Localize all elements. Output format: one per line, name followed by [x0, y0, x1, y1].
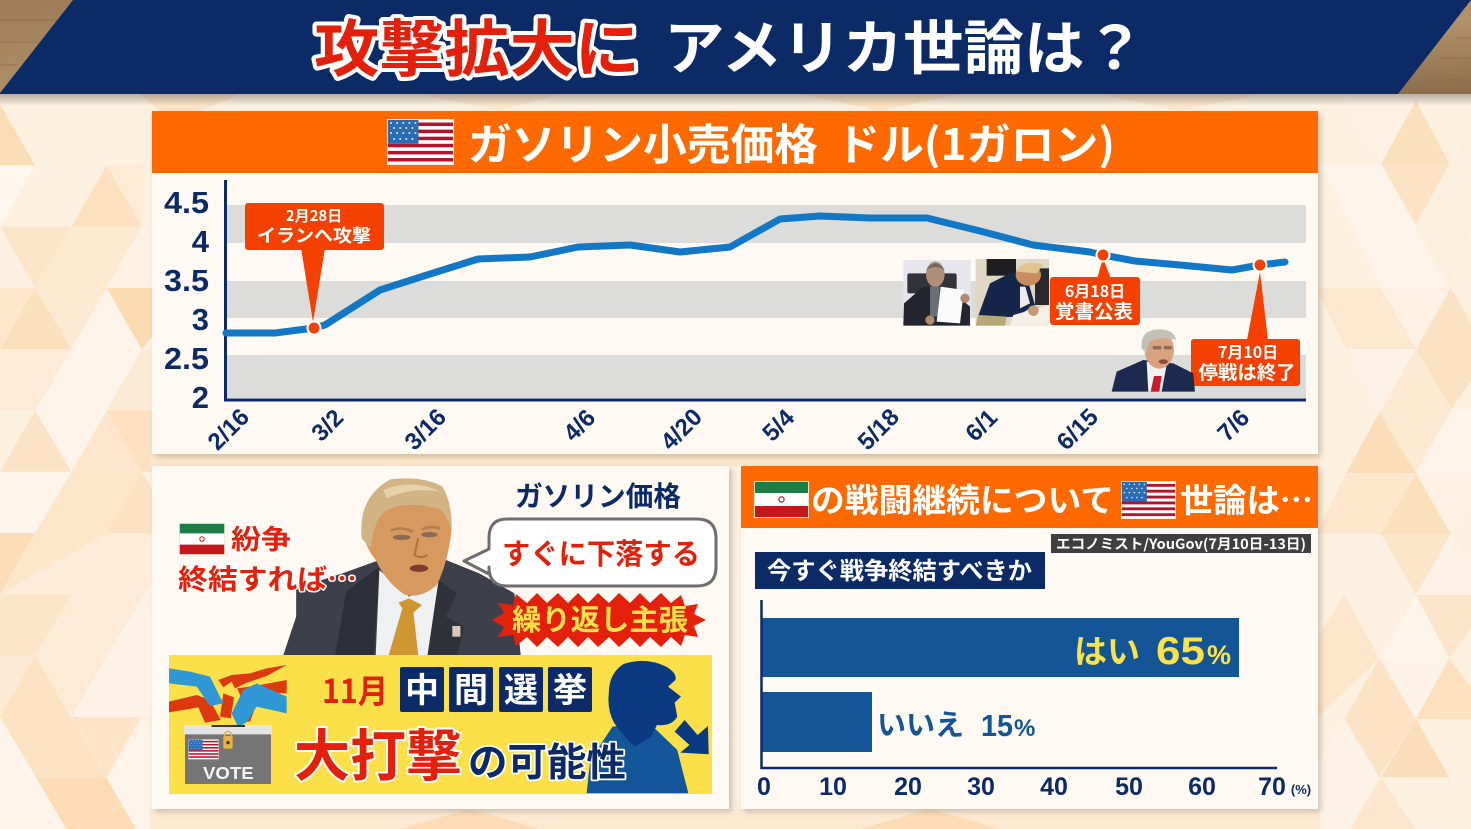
- panel background: [152, 466, 729, 809]
- photo: Trump speaking: [283, 479, 521, 655]
- callout: Feb 28: 2月28日: [286, 205, 342, 226]
- x axis labels: 4/6: [558, 404, 601, 447]
- title: white part: アメリカ世論は？: [664, 1, 1145, 86]
- label: no 15%: 15: [981, 708, 1013, 743]
- x axis labels: 10: [819, 773, 847, 801]
- header text: unit: ドル(1ガロン): [836, 111, 1115, 173]
- icon: US flag: [188, 739, 219, 759]
- icon: Iran flag: [754, 481, 809, 518]
- text: if ended: 終結すれば…: [178, 558, 357, 598]
- header text: ガソリン小売価格: [468, 111, 818, 173]
- text: midterm tiles: 間: [454, 663, 488, 712]
- label: yes 65%: [1074, 625, 1231, 673]
- label: yes 65%: 65: [1156, 630, 1205, 673]
- x axis labels: 2/16: [203, 404, 255, 456]
- text: midterm tiles: 選: [504, 663, 538, 712]
- icon: US flag: [387, 119, 454, 165]
- callout: Jul 10: 7月10日: [1218, 339, 1278, 363]
- text: conflict: 紛争: [231, 518, 291, 557]
- label: yes 65%: はい: [1074, 625, 1140, 673]
- x axis labels: [203, 404, 1255, 456]
- y axis labels: [164, 185, 210, 415]
- y axis labels: 2.5: [164, 341, 209, 376]
- y axis labels: 3.5: [164, 263, 209, 298]
- y axis labels: 3: [192, 302, 209, 337]
- x axis labels: 40: [1040, 773, 1068, 801]
- x axis labels: [757, 773, 1311, 801]
- axes: [226, 180, 1306, 400]
- callout: Feb 28: [245, 203, 384, 334]
- x axis labels: 60: [1188, 773, 1216, 801]
- x axis labels: 3/2: [306, 404, 349, 447]
- callout: Feb 28: イランへ攻撃: [257, 222, 371, 248]
- x axis labels: (%): [1291, 782, 1311, 797]
- bar chart: [757, 600, 1311, 801]
- callout: Jun 18: 6月18日: [1065, 278, 1125, 302]
- header text: 世論は…: [1180, 474, 1313, 522]
- text: November: 11月: [322, 665, 388, 713]
- x axis labels: 6/1: [960, 404, 1003, 447]
- x axis labels: 6/15: [1052, 404, 1104, 456]
- VOTE label: VOTE: [203, 763, 254, 783]
- y axis labels: 2: [192, 380, 209, 415]
- panel: Trump's claim and midterm: [152, 466, 729, 809]
- photo: Trump portrait: [1112, 329, 1195, 392]
- illustration: hands and ballots: [169, 665, 287, 727]
- title: red part: 攻撃拡大に: [314, 0, 640, 89]
- header text: の戦闘継続について: [811, 474, 1114, 522]
- label: no 15%: [877, 702, 1035, 744]
- panel: gasoline retail price: [152, 111, 1318, 456]
- x axis labels: 30: [967, 773, 995, 801]
- speech balloon: すぐに下落する: [502, 531, 700, 573]
- x axis labels: 0: [757, 773, 771, 801]
- icon: Iran flag: [179, 523, 225, 555]
- y axis labels: 4: [192, 224, 210, 259]
- y axis labels: 4.5: [164, 185, 209, 220]
- bar: yes: [762, 618, 1239, 677]
- callout: Jul 10: 停戦は終了: [1198, 358, 1296, 385]
- text: midterm tiles: [400, 663, 592, 712]
- illustration: ballot box: [184, 725, 272, 784]
- x axis labels: 20: [894, 773, 922, 801]
- text: possibility: の可能性: [468, 732, 626, 788]
- panel header: [741, 466, 1318, 528]
- wood corners: [0, 0, 1471, 94]
- x axis labels: 50: [1115, 773, 1143, 801]
- question label: 今すぐ戦争終結すべきか: [767, 551, 1032, 586]
- text: midterm tiles: 中: [405, 663, 439, 712]
- callout: Jun 18: [1050, 248, 1140, 325]
- photo: Iranian official with document: [903, 260, 971, 326]
- speech balloon: [464, 519, 716, 586]
- x axis labels: 70: [1258, 773, 1286, 801]
- panel header: [152, 111, 1318, 173]
- panel background: [152, 111, 1318, 454]
- callout: Jun 18: 覚書公表: [1055, 297, 1133, 324]
- source label: エコノミスト/YouGov(7月10日-13日): [1056, 534, 1306, 554]
- label: no 15%: いいえ: [877, 702, 964, 744]
- text: big blow: 大打撃: [294, 712, 462, 793]
- text: midterm tiles: 挙: [553, 663, 587, 712]
- banner: midterm election: [169, 655, 712, 794]
- title banner: [0, 0, 1471, 94]
- silhouette: Trump: [587, 661, 709, 793]
- panel background: [741, 466, 1318, 809]
- x axis labels: 7/6: [1212, 404, 1255, 447]
- x axis labels: 5/4: [757, 404, 800, 447]
- label: no 15%: %: [1014, 715, 1035, 742]
- starburst: repeated claim: [492, 593, 706, 647]
- x axis labels: 5/18: [853, 404, 905, 456]
- bar: no: [762, 692, 872, 752]
- text: gasoline price: ガソリン価格: [515, 475, 681, 515]
- line: gasoline price: [226, 216, 1285, 333]
- icon: US flag: [1121, 481, 1176, 519]
- x axis labels: 4/20: [656, 404, 708, 456]
- axes: [762, 600, 1277, 768]
- x axis labels: 3/16: [400, 404, 452, 456]
- photo: Trump signing: [976, 259, 1049, 326]
- starburst: repeated claim: 繰り返し主張: [512, 597, 688, 639]
- callout: Jul 10: [1191, 258, 1300, 386]
- panel: US public opinion: [741, 466, 1318, 809]
- label: yes 65%: %: [1207, 640, 1231, 670]
- chart bands: [225, 205, 1306, 398]
